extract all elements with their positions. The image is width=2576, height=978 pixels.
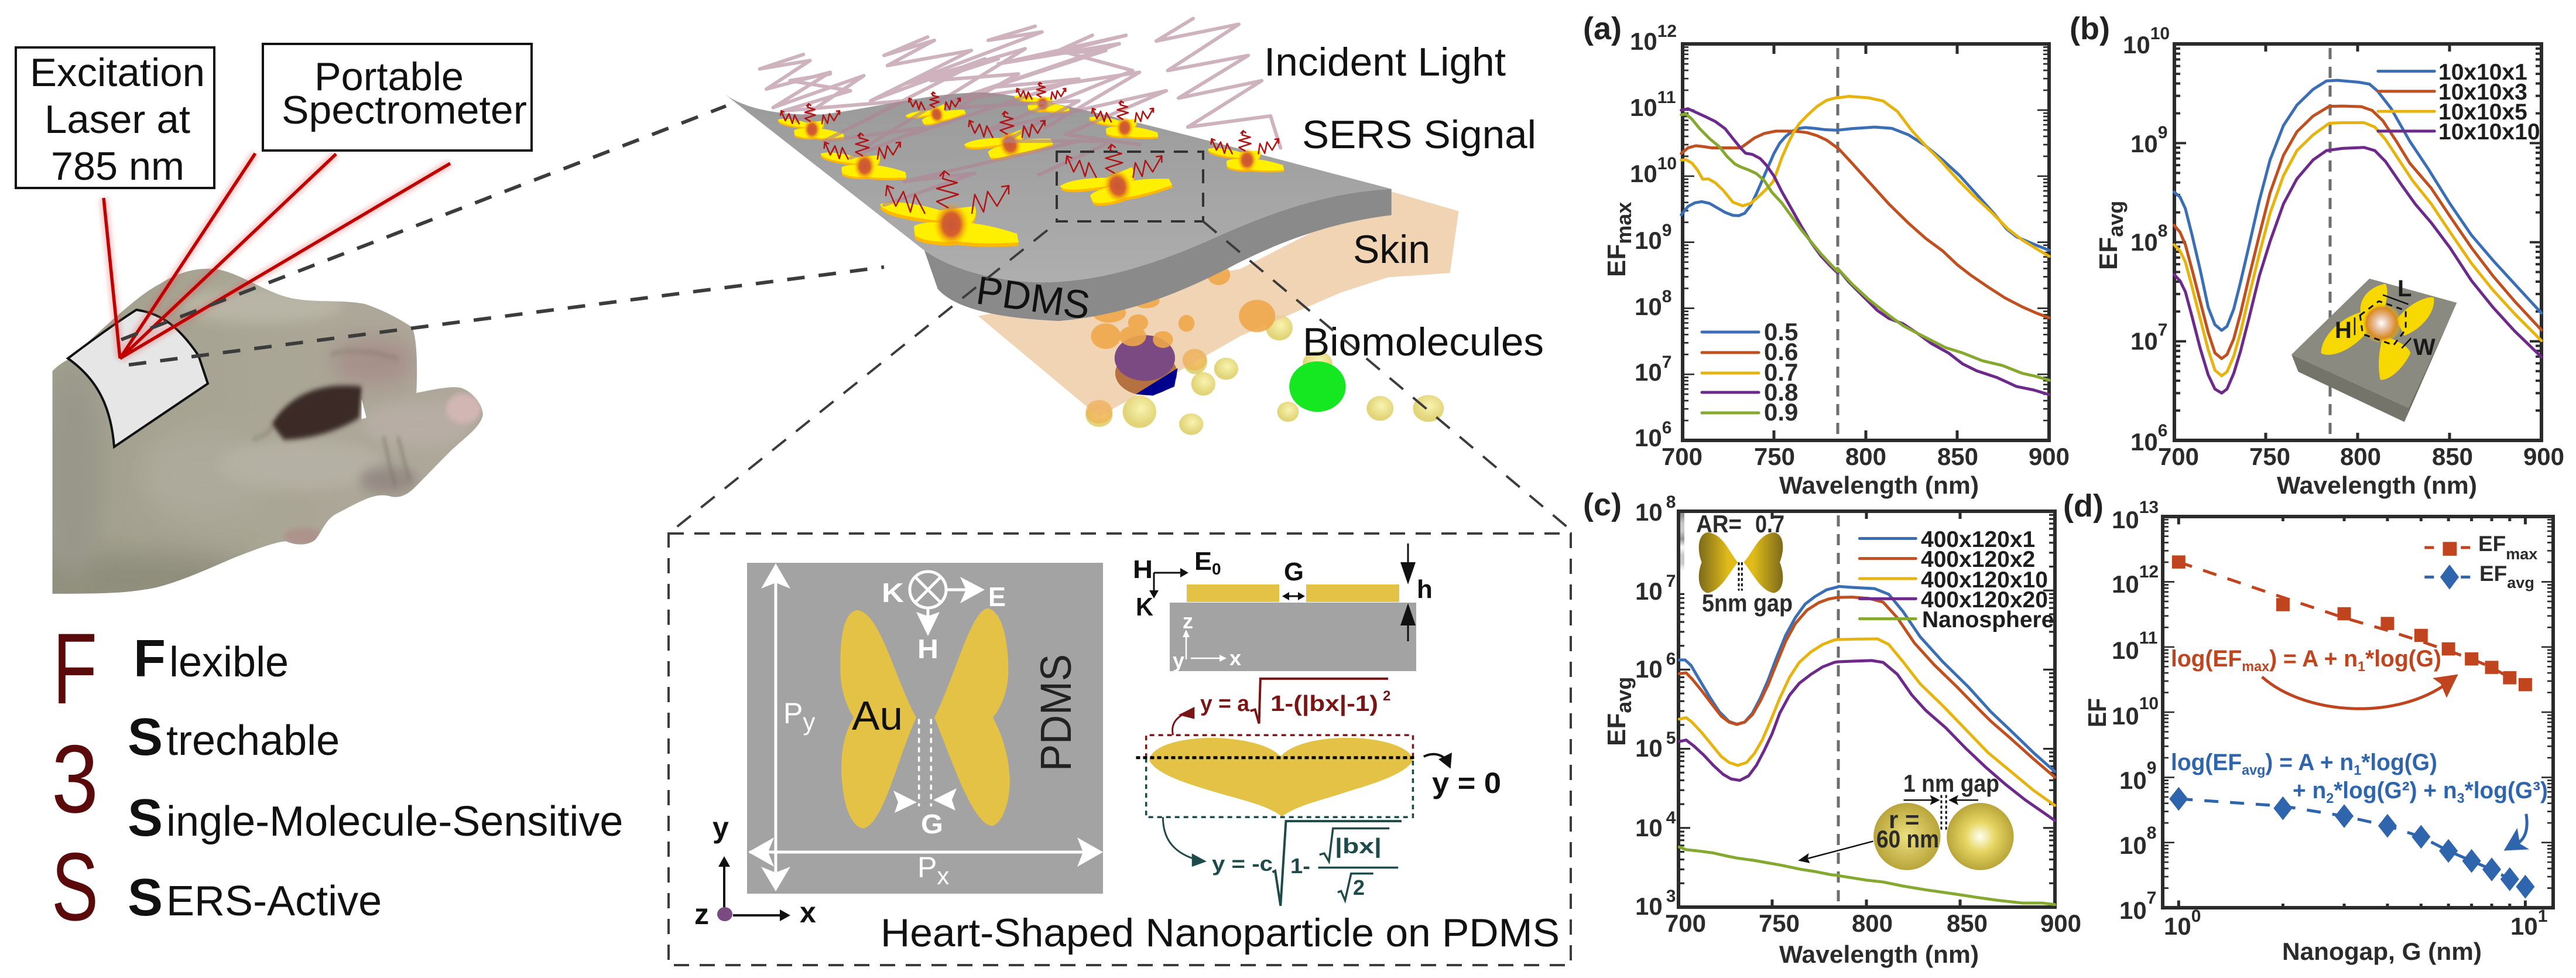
- property list: [128, 630, 623, 927]
- y tick labels d: 8: [2147, 823, 2156, 843]
- legend d: EF: [2479, 562, 2507, 586]
- axes a: [1683, 44, 2049, 441]
- portable spectrometer label: Spectrometer: [282, 88, 527, 132]
- legend d: max: [2506, 545, 2537, 563]
- axis titles b: [2094, 201, 2477, 499]
- axis titles c: EF: [1602, 713, 1631, 746]
- y tick labels d: [2112, 498, 2159, 924]
- inset: gold nanosphere dimer: 1 nm gap: [1903, 770, 1999, 797]
- cross-section view: x: [1229, 646, 1241, 670]
- y tick labels c: 3: [1666, 887, 1676, 906]
- legend c: Nanosphere: [1922, 607, 2054, 632]
- x tick labels a: 800: [1845, 443, 1886, 470]
- bowtie gold heart nanoparticles: [840, 608, 1010, 829]
- x tick labels a: 850: [1937, 443, 1978, 470]
- red top-curve equation: 2: [1383, 688, 1390, 704]
- axis titles c: [1602, 677, 1979, 968]
- y tick labels b: 8: [2158, 221, 2167, 241]
- y tick labels c: 5: [1666, 729, 1676, 748]
- x tick labels c: 850: [1947, 909, 1988, 937]
- axis titles d: Nanogap, G (nm): [2282, 938, 2482, 965]
- y tick labels b: 6: [2158, 421, 2167, 440]
- x tick labels a: 700: [1662, 443, 1703, 470]
- EFmax fit equation: [2171, 646, 2458, 709]
- inset: heart bowtie AR 0.7: AR=: [1696, 510, 1742, 538]
- curve 0.9: [1681, 114, 2049, 380]
- cross-section view: E: [1194, 547, 1212, 576]
- axis titles a: max: [1612, 202, 1636, 244]
- y tick labels b: 10: [2130, 428, 2158, 456]
- EFavg fit equation: + n: [2293, 778, 2327, 803]
- nanoparticle array: [777, 95, 1284, 247]
- axis titles b: Wavelength (nm): [2277, 471, 2477, 499]
- legend c: 400x120x10: [1921, 567, 2048, 593]
- legend a: [1702, 318, 1798, 426]
- y tick labels d: 10: [2119, 832, 2147, 859]
- panel: heart-shaped nanoparticle on PDMS: [669, 534, 1571, 965]
- red top-curve equation: [1200, 688, 1390, 716]
- inset: gold nanosphere dimer: 60 nm: [1876, 825, 1939, 853]
- top view labels: y: [803, 708, 815, 736]
- x tick labels a: [1662, 443, 2070, 470]
- legend d: avg: [2507, 574, 2534, 591]
- y tick labels a: 10: [1657, 154, 1677, 173]
- x tick labels d: 1: [2538, 907, 2547, 926]
- y tick labels d: 10: [2119, 897, 2147, 924]
- legend c: 400x120x2: [1921, 547, 2035, 572]
- y tick labels a: 10: [1635, 227, 1662, 254]
- x tick labels d: 10: [2510, 912, 2538, 940]
- axis titles d: EF: [2083, 698, 2112, 727]
- curve 400x120x1: [1679, 586, 2055, 771]
- top view PDMS square: [747, 563, 1103, 894]
- y tick labels c: 10: [1635, 577, 1663, 605]
- axis titles c: avg: [1612, 677, 1636, 713]
- excitation laser label: [16, 47, 214, 189]
- x tick labels c: 750: [1759, 909, 1800, 937]
- legend c: 400x120x1: [1921, 527, 2035, 552]
- cross-section view: [1133, 543, 1433, 672]
- y tick labels a: 11: [1657, 88, 1676, 107]
- y tick labels c: 10: [1635, 498, 1663, 526]
- EFmax series: [2172, 555, 2532, 691]
- top view labels: [783, 577, 1080, 890]
- incident light: [760, 19, 1280, 205]
- x tick labels b: [2158, 443, 2564, 470]
- y tick labels b: 10: [2123, 31, 2150, 59]
- y tick labels d: 13: [2139, 498, 2159, 517]
- y tick labels a: 12: [1657, 22, 1677, 41]
- x tick labels b: 750: [2249, 443, 2290, 470]
- period arrows: [748, 563, 1103, 891]
- y tick labels b: 10: [2130, 327, 2158, 355]
- cross-section view: K: [1136, 593, 1153, 621]
- excitation laser label: Excitation: [30, 50, 205, 95]
- y tick labels a: 9: [1662, 221, 1671, 240]
- EFmax fit equation: max: [2242, 659, 2270, 675]
- EFavg fit equation: *log(G²) + n: [2334, 778, 2457, 803]
- legend a: 0.6: [1764, 338, 1798, 365]
- device labels: Incident Light: [1264, 40, 1506, 84]
- y tick labels d: 11: [2139, 628, 2157, 648]
- x tick labels b: 850: [2432, 443, 2473, 470]
- inset: heart bowtie AR 0.7: 5nm gap: [1702, 589, 1793, 617]
- 785 nm marker c: [1837, 515, 1839, 906]
- cross-section view: y: [1173, 648, 1184, 672]
- EFmax fit equation: *log(G): [2365, 646, 2441, 672]
- property list: SERS-Active: [128, 868, 382, 927]
- selection box and guide lines: [669, 152, 1571, 534]
- y tick labels a: 10: [1635, 424, 1662, 452]
- top view labels: Au: [852, 693, 903, 738]
- EFavg series: [2169, 787, 2534, 898]
- panel caption: Heart-Shaped Nanoparticle on PDMS: [881, 911, 1560, 955]
- inset: nanoparticle on block: H: [2335, 317, 2352, 343]
- top view labels: P: [917, 851, 937, 884]
- axes b: [2174, 44, 2541, 442]
- y=0 label: y = 0: [1432, 767, 1501, 799]
- y tick labels a: 7: [1662, 353, 1671, 372]
- chart (a) EFmax vs wavelength: [1583, 11, 2070, 499]
- EFavg fit equation: *log(G³): [2465, 778, 2548, 803]
- y tick labels d: 7: [2147, 888, 2156, 908]
- device labels: PDMS: [974, 268, 1093, 328]
- x tick labels c: 700: [1665, 909, 1706, 937]
- legend a: 0.5: [1764, 318, 1798, 346]
- legend c: 400x120x20: [1921, 587, 2048, 613]
- inset: gold nanosphere dimer: r =: [1889, 806, 1920, 833]
- y tick labels d: 9: [2147, 758, 2156, 778]
- red top-curve equation: 1-(|bx|-1): [1270, 692, 1378, 716]
- axis titles a: EF: [1602, 244, 1631, 277]
- x tick labels b: 900: [2523, 443, 2564, 470]
- curve 0.6: [1681, 131, 2049, 318]
- legend b: 10x10x1: [2438, 60, 2527, 85]
- curve 10x10x5: [2174, 122, 2541, 376]
- axis titles d: [2083, 698, 2482, 965]
- x tick labels c: 900: [2040, 909, 2081, 937]
- y tick labels d: 10: [2119, 767, 2147, 794]
- y tick labels c: 10: [1635, 655, 1663, 683]
- legend a: 0.8: [1764, 378, 1798, 406]
- portable spectrometer label: Portable: [314, 54, 464, 99]
- EFavg fit equation: ) = A + n: [2265, 750, 2354, 775]
- curve 400x120x10: [1679, 639, 2055, 805]
- EFmax fit equation: ) = A + n: [2269, 646, 2358, 672]
- red top-curve equation: y = a: [1200, 692, 1250, 716]
- cross-section view: h: [1417, 575, 1433, 604]
- chart (b) EFavg vs wavelength: [2070, 11, 2564, 499]
- panel letter d: (d): [2063, 488, 2104, 524]
- y tick labels a: 6: [1662, 418, 1671, 437]
- inset: nanoparticle on block: W: [2413, 334, 2435, 360]
- legend b: 10x10x5: [2438, 100, 2527, 125]
- top view labels: PDMS: [1032, 654, 1080, 771]
- curve 400x120x2: [1679, 597, 2055, 777]
- y tick labels c: 10: [1635, 814, 1663, 842]
- curve 10x10x1: [2174, 80, 2541, 330]
- device labels: Skin: [1353, 227, 1430, 272]
- curve nanosphere: [1679, 847, 2055, 905]
- y tick labels b: 10: [2130, 228, 2158, 256]
- y tick labels a: 8: [1662, 287, 1671, 306]
- device labels: Biomolecules: [1303, 320, 1544, 364]
- F3S acronym: F: [53, 613, 97, 725]
- y tick labels a: 10: [1630, 94, 1657, 121]
- curve 0.7: [1681, 96, 2049, 257]
- y tick labels d: 10: [2112, 637, 2139, 664]
- cross-section view: G: [1284, 558, 1304, 586]
- y tick labels c: 10: [1635, 734, 1663, 762]
- flexible patch on hand: [68, 310, 208, 447]
- green bottom-curve equation: 1-: [1290, 854, 1310, 878]
- axis titles b: avg: [2104, 201, 2128, 237]
- cross-section view: z: [1183, 609, 1193, 633]
- 785 nm marker a: [1836, 48, 1839, 439]
- y tick labels c: [1635, 493, 1676, 920]
- y tick labels d: 10: [2112, 570, 2139, 598]
- xyz axes: z: [694, 898, 709, 931]
- y tick labels c: 10: [1635, 892, 1663, 920]
- green bottom-curve equation: 2: [1353, 876, 1365, 900]
- curve 0.5: [1681, 127, 2049, 250]
- green bottom-curve equation: |bx|: [1335, 834, 1382, 859]
- y tick labels a: 10: [1630, 160, 1657, 187]
- inset: nanoparticle on block: L: [2397, 276, 2411, 302]
- y tick labels b: [2123, 24, 2170, 456]
- EFavg fit equation: [2171, 750, 2548, 850]
- y tick labels b: 9: [2158, 123, 2167, 142]
- top view labels: H: [917, 634, 938, 664]
- x tick labels c: 800: [1852, 909, 1893, 937]
- x tick labels d: [2164, 907, 2547, 940]
- chart (c) EFavg with nanosphere comparison: [1583, 487, 2081, 968]
- x tick labels a: 750: [1754, 443, 1795, 470]
- axes c: [1678, 511, 2055, 908]
- cross-section view: 0: [1212, 560, 1221, 578]
- top view labels: x: [937, 862, 949, 890]
- y tick labels a: 10: [1630, 28, 1657, 55]
- top view labels: P: [783, 697, 803, 730]
- EFmax fit equation: 1: [2358, 659, 2365, 675]
- portable spectrometer label: [263, 44, 532, 151]
- y tick labels d: 10: [2112, 506, 2139, 534]
- axes d: [2163, 517, 2553, 908]
- SERS signal waves: [780, 83, 1279, 214]
- F3S acronym: S: [52, 833, 98, 941]
- green bottom-curve equation: y = -c: [1212, 852, 1273, 876]
- y tick labels c: 7: [1666, 572, 1676, 591]
- heart shape diagram: [1136, 679, 1452, 906]
- curve 10x10x10: [2174, 148, 2541, 393]
- curve 0.8: [1681, 109, 2049, 395]
- xyz axes: [694, 811, 816, 931]
- axis titles a: [1602, 202, 1979, 499]
- curve 10x10x3: [2174, 106, 2541, 358]
- y tick labels d: 12: [2139, 562, 2159, 582]
- F3S acronym: 3: [52, 725, 98, 833]
- property list: Flexible: [133, 630, 289, 688]
- axis titles c: Wavelength (nm): [1779, 941, 1979, 968]
- laser and collected signal beams: [104, 153, 450, 358]
- device labels: SERS Signal: [1302, 112, 1536, 157]
- curve 400x120x20: [1679, 661, 2055, 820]
- y tick labels a: 10: [1635, 358, 1662, 386]
- xyz axes: x: [800, 896, 816, 929]
- property list: Single-Molecule-Sensitive: [128, 789, 623, 847]
- legend b: 10x10x3: [2438, 80, 2527, 105]
- panel letter a: (a): [1583, 11, 1622, 46]
- EFavg fit equation: avg: [2242, 762, 2265, 778]
- EFmax fit equation: log(EF: [2171, 646, 2243, 672]
- x tick labels c: [1665, 909, 2081, 937]
- x tick labels a: 900: [2029, 443, 2070, 470]
- y tick labels d: 10: [2139, 694, 2159, 713]
- axis titles a: Wavelength (nm): [1779, 471, 1979, 499]
- xyz axes: y: [712, 811, 729, 844]
- EFavg fit equation: 2: [2326, 791, 2334, 806]
- legend a: 0.9: [1764, 398, 1798, 426]
- top view labels: G: [921, 809, 943, 839]
- y tick labels c: 6: [1666, 649, 1676, 669]
- green bottom-curve equation: [1212, 834, 1382, 900]
- y tick labels a: 10: [1635, 293, 1662, 320]
- excitation laser label: Laser at: [44, 97, 190, 142]
- legend b: 10x10x10: [2438, 119, 2540, 145]
- y tick labels d: 10: [2112, 702, 2139, 730]
- F3S acronym: [52, 613, 98, 941]
- device labels: [974, 40, 1544, 364]
- EFavg fit equation: 3: [2457, 791, 2465, 806]
- x tick labels b: 800: [2340, 443, 2381, 470]
- panel letter c: (c): [1583, 487, 1622, 522]
- EFavg fit equation: log(EF: [2171, 750, 2243, 775]
- y tick labels a: [1630, 22, 1677, 452]
- EFavg fit equation: *log(G): [2361, 750, 2437, 775]
- chart (d) EF vs nanogap: [2063, 488, 2553, 965]
- polarization symbols: [893, 572, 985, 813]
- axis titles b: EF: [2094, 237, 2123, 270]
- top view labels: E: [988, 582, 1006, 612]
- 785 nm marker b: [2329, 48, 2331, 439]
- PDMS substrate: [725, 93, 1392, 321]
- y tick labels c: 8: [1666, 493, 1676, 512]
- legend a: 0.7: [1764, 358, 1798, 386]
- EFavg fit equation: 1: [2354, 762, 2361, 778]
- property list: Strechable: [128, 708, 340, 767]
- cross-section view: H: [1133, 555, 1153, 584]
- x tick labels d: 0: [2191, 907, 2201, 926]
- top view labels: K: [882, 577, 904, 608]
- x tick labels d: 10: [2164, 912, 2191, 940]
- hand photo: [53, 268, 483, 594]
- inset: heart bowtie AR 0.7: [1696, 510, 1793, 617]
- y tick labels b: 10: [2130, 130, 2158, 158]
- zoom guide lines from patch to device: [121, 106, 884, 365]
- legend c: [1859, 527, 2054, 632]
- y tick labels b: 7: [2158, 320, 2167, 340]
- inset: gold nanosphere dimer: [1798, 770, 2014, 870]
- x tick labels b: 700: [2158, 443, 2199, 470]
- inset: heart bowtie AR 0.7: 0.7: [1755, 510, 1784, 538]
- panel letter b: (b): [2070, 11, 2110, 46]
- y tick labels b: 10: [2150, 24, 2170, 43]
- legend d: [2424, 532, 2537, 591]
- excitation laser label: 785 nm: [51, 144, 184, 189]
- legend b: [2378, 60, 2540, 145]
- skin layer with biomolecules: [978, 192, 1459, 435]
- inset: nanoparticle on block: [2291, 276, 2457, 422]
- legend d: EF: [2478, 532, 2506, 556]
- y tick labels c: 4: [1666, 808, 1676, 827]
